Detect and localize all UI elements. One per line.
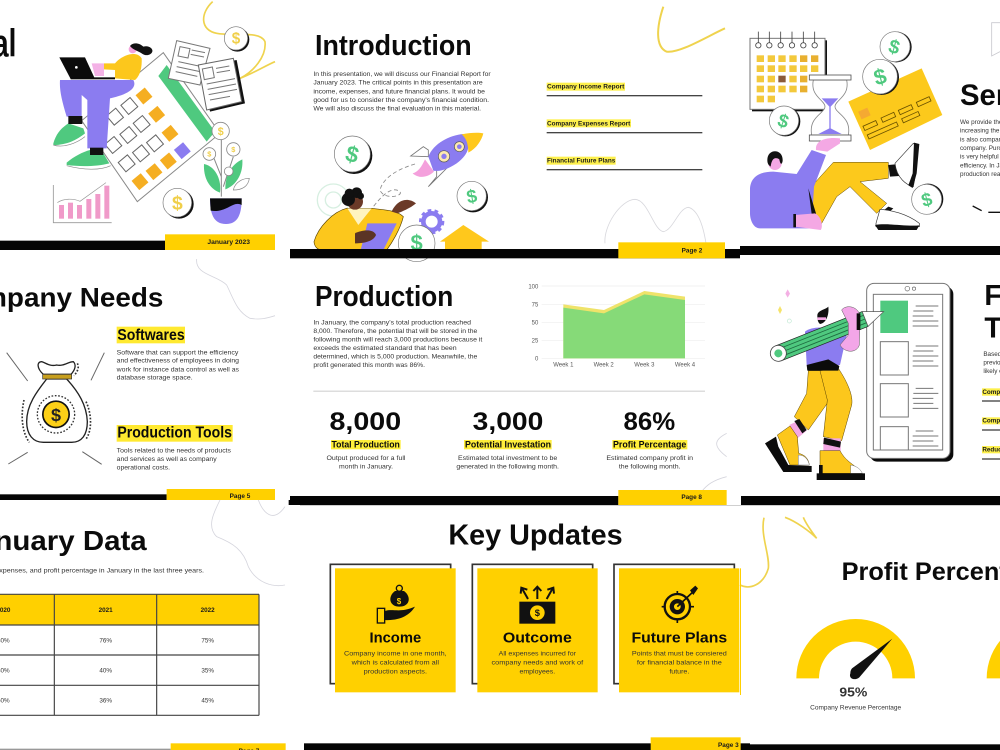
area chart: Week 1 bbox=[553, 363, 574, 369]
gauge: second fragment bbox=[987, 619, 1000, 678]
footer tab bbox=[165, 234, 275, 250]
panel: key updates slide bbox=[300, 505, 1000, 750]
footer bar bbox=[290, 496, 618, 505]
block: production tools: Production Tools bbox=[117, 425, 232, 442]
stat: total production bbox=[326, 409, 405, 471]
footer tab bbox=[618, 490, 727, 505]
footer tab bbox=[618, 242, 725, 258]
person sitting bbox=[750, 138, 919, 230]
plant with coins: $ bbox=[231, 145, 235, 154]
page number: Page 8 bbox=[681, 494, 702, 501]
gauge: revenue: 95% bbox=[839, 685, 867, 700]
icon: coins: $ bbox=[775, 109, 792, 133]
icon: money bag bbox=[7, 353, 104, 464]
card: future plans: for financial balance in the bbox=[637, 660, 722, 667]
card: future plans bbox=[614, 564, 739, 692]
stat: potential investation bbox=[456, 409, 559, 471]
icon: coins: $ bbox=[343, 140, 362, 168]
icon: coin bottom: $ bbox=[172, 193, 183, 214]
card: income bbox=[330, 564, 456, 692]
icon: house bbox=[440, 225, 489, 250]
page number: Page 2 bbox=[682, 247, 703, 254]
paragraph: good for us to consider the company's financial condition. bbox=[313, 97, 489, 104]
hourglass bbox=[809, 75, 851, 141]
icon: rocket bbox=[373, 133, 483, 207]
icon: coin top: $ bbox=[232, 31, 241, 48]
footer tab bbox=[171, 743, 286, 750]
list: report items: Company Income Report bbox=[547, 84, 625, 91]
icon: coin bottom bbox=[163, 188, 194, 219]
credit card bbox=[848, 68, 942, 150]
icon: coins bbox=[334, 136, 488, 262]
bar chart bbox=[53, 183, 112, 223]
paragraph: We will also discuss the final evaluation in this material. bbox=[313, 106, 481, 113]
heading: Introduction bbox=[315, 30, 472, 62]
card: income: Income bbox=[369, 631, 421, 647]
page number: Page 3 bbox=[718, 742, 739, 749]
paragraph: following month will reach 3,000 productions because it bbox=[313, 337, 483, 344]
stat: total production: month in January. bbox=[339, 464, 393, 471]
card: outcome: All expenses incurred for bbox=[499, 651, 576, 658]
block: softwares: Softwares bbox=[117, 327, 185, 344]
stat: total production: Total Production bbox=[331, 440, 400, 450]
area chart: Week 4 bbox=[675, 363, 696, 369]
footer tab bbox=[167, 489, 275, 500]
stat: potential investation: 3,000 bbox=[473, 409, 543, 436]
table: 76% bbox=[99, 637, 112, 644]
table bbox=[0, 594, 259, 715]
paragraph bbox=[960, 119, 1000, 178]
calculator illustration bbox=[82, 53, 220, 202]
gauge: revenue bbox=[796, 619, 915, 712]
list: report items bbox=[547, 83, 702, 170]
stat: profit percentage: the following month. bbox=[619, 464, 681, 471]
block: production tools: operational costs. bbox=[117, 465, 170, 472]
list: report items: Company Expenses Report bbox=[547, 120, 631, 127]
paragraph: determined, which is 5,000 production. Meanwhile, the bbox=[313, 353, 478, 360]
footer tab bbox=[651, 737, 741, 750]
panel: introduction slide bbox=[290, 7, 740, 262]
documents bbox=[168, 41, 245, 112]
card: outcome: employees. bbox=[519, 668, 555, 675]
stat: profit percentage: 86% bbox=[623, 409, 675, 436]
table: 36% bbox=[99, 698, 112, 705]
divider bbox=[313, 390, 705, 393]
gray squiggle bbox=[605, 199, 706, 243]
person with clipboard bbox=[314, 187, 416, 250]
panel: profit percentage slide bbox=[740, 517, 1000, 750]
area chart: 50 bbox=[532, 320, 539, 326]
footer bar bbox=[741, 496, 1000, 505]
heading: Key Updates bbox=[448, 519, 623, 551]
paragraph bbox=[983, 351, 1000, 375]
card: outcome: company needs and work of bbox=[491, 660, 583, 667]
icon: coins: $ bbox=[411, 231, 423, 256]
block: production tools bbox=[117, 425, 233, 472]
panel: cover slide bbox=[0, 2, 275, 250]
list: report items: Financial Future Plans bbox=[547, 158, 616, 165]
paragraph: January 2023. The critical points in this presentation are bbox=[313, 80, 483, 87]
plant with coins: $ bbox=[218, 126, 224, 138]
paragraph: In January, the company's total production reached bbox=[313, 320, 472, 327]
heading bbox=[984, 280, 1000, 344]
stat: profit percentage: Profit Percentage bbox=[613, 440, 686, 450]
stat: profit percentage bbox=[606, 409, 694, 471]
footer bar bbox=[0, 241, 165, 250]
paragraph: profit generated this month was 86%. bbox=[313, 362, 425, 369]
gray squiggles bbox=[212, 500, 285, 586]
plant with coins: $ bbox=[207, 150, 211, 159]
stat: total production: 8,000 bbox=[329, 409, 401, 436]
icon: coins: $ bbox=[871, 63, 889, 90]
footer bar bbox=[740, 246, 1000, 255]
footer bar bbox=[290, 249, 740, 258]
yellow squiggles bbox=[740, 517, 817, 587]
footer bar fragment of previous slide bbox=[289, 500, 300, 505]
panel: company needs slide bbox=[0, 259, 275, 500]
page number: Page 5 bbox=[230, 493, 251, 500]
calendar bbox=[750, 32, 827, 111]
icon: money with arrows: $ bbox=[535, 608, 541, 618]
dashes decoration bbox=[973, 206, 1000, 212]
top edge bbox=[300, 505, 1000, 506]
table: 75% bbox=[201, 637, 214, 644]
stat: potential investation: Potential Investation bbox=[465, 440, 551, 450]
icon: coins bbox=[769, 32, 943, 214]
icon: hand with money bag: $ bbox=[397, 597, 402, 606]
block: softwares: and effectiveness of employees in doing bbox=[117, 358, 240, 365]
phone mockup bbox=[867, 283, 953, 462]
list: target items bbox=[982, 388, 1000, 460]
block: softwares: work for instance data control as well as bbox=[116, 366, 239, 373]
panel: january data slide bbox=[0, 500, 300, 750]
gray squiggle bbox=[197, 259, 275, 319]
block: production tools: and services as well as company bbox=[117, 456, 218, 463]
yellow squiggle bbox=[658, 7, 725, 52]
icon: coins: $ bbox=[465, 185, 479, 207]
paragraph: In this presentation, we will discuss our Financial Report for bbox=[313, 71, 491, 78]
card: future plans: Future Plans bbox=[631, 631, 727, 647]
card: income: Company income in one month, bbox=[344, 651, 447, 658]
area chart bbox=[528, 284, 705, 369]
card: outcome bbox=[472, 564, 598, 692]
paragraph: exceeds the estimated standard that has been bbox=[313, 345, 457, 352]
card: future plans: future. bbox=[669, 668, 690, 675]
block: softwares: Software that can support the efficiency bbox=[117, 349, 239, 356]
area chart: 100 bbox=[528, 284, 539, 290]
paragraph: income, expenses, and future financial plans. It would be bbox=[313, 88, 486, 95]
area chart: 0 bbox=[535, 356, 539, 362]
icon: coin top bbox=[224, 27, 249, 52]
card: future plans: Points that must be consiered bbox=[632, 651, 727, 658]
icon: money bag: $ bbox=[51, 405, 61, 425]
footer bar bbox=[304, 743, 750, 750]
paragraph bbox=[313, 320, 483, 369]
footer bar bbox=[741, 744, 1000, 750]
plant with coins bbox=[203, 122, 249, 224]
area chart: 75 bbox=[532, 302, 539, 308]
person with laptop bbox=[53, 43, 152, 169]
stat: total production: Output produced for a full bbox=[326, 455, 405, 462]
area chart: 25 bbox=[532, 338, 539, 344]
table: 2022 bbox=[201, 607, 215, 614]
paragraph: 8,000. Therefore, the potential that will be stored in the bbox=[313, 328, 478, 335]
heading: Production bbox=[315, 281, 453, 313]
card: income: which is calculated from all bbox=[351, 660, 439, 667]
card edge bbox=[740, 568, 741, 695]
block: softwares: database storage space. bbox=[117, 375, 193, 382]
footer bar bbox=[0, 494, 167, 500]
icon: coins: $ bbox=[919, 188, 935, 211]
panel: production slide bbox=[290, 281, 727, 505]
card: income: production aspects. bbox=[364, 668, 427, 675]
block: production tools: Tools related to the needs of products bbox=[117, 448, 231, 455]
stat: potential investation: generated in the following month. bbox=[456, 464, 559, 471]
table: 2021 bbox=[99, 607, 113, 614]
gray triangle decoration bbox=[992, 23, 1000, 56]
table: 35% bbox=[201, 667, 214, 674]
panel: future targets slide bbox=[741, 280, 1000, 505]
footer date: January 2023 bbox=[207, 239, 251, 246]
table: 40% bbox=[99, 667, 112, 674]
stat: potential investation: Estimated total investment to be bbox=[458, 455, 558, 462]
gray squiggle fragments bbox=[702, 433, 727, 492]
gauge: revenue: Company Revenue Percentage bbox=[810, 705, 902, 712]
area chart: Week 3 bbox=[634, 363, 655, 369]
footer bar bbox=[0, 749, 171, 750]
area chart: Week 2 bbox=[594, 363, 614, 369]
block: softwares bbox=[116, 327, 240, 382]
table: 45% bbox=[201, 698, 214, 705]
icon: gears bbox=[317, 184, 443, 233]
sparkles bbox=[778, 289, 791, 323]
card: outcome: Outcome bbox=[503, 631, 572, 647]
stat: profit percentage: Estimated company profit in bbox=[606, 455, 694, 462]
panel: services slide bbox=[740, 23, 1000, 255]
person with pencil bbox=[765, 304, 887, 480]
yellow squiggle bbox=[204, 2, 275, 78]
paragraph bbox=[313, 71, 491, 113]
icon: coins: $ bbox=[886, 36, 902, 59]
icon: target bbox=[662, 586, 698, 623]
